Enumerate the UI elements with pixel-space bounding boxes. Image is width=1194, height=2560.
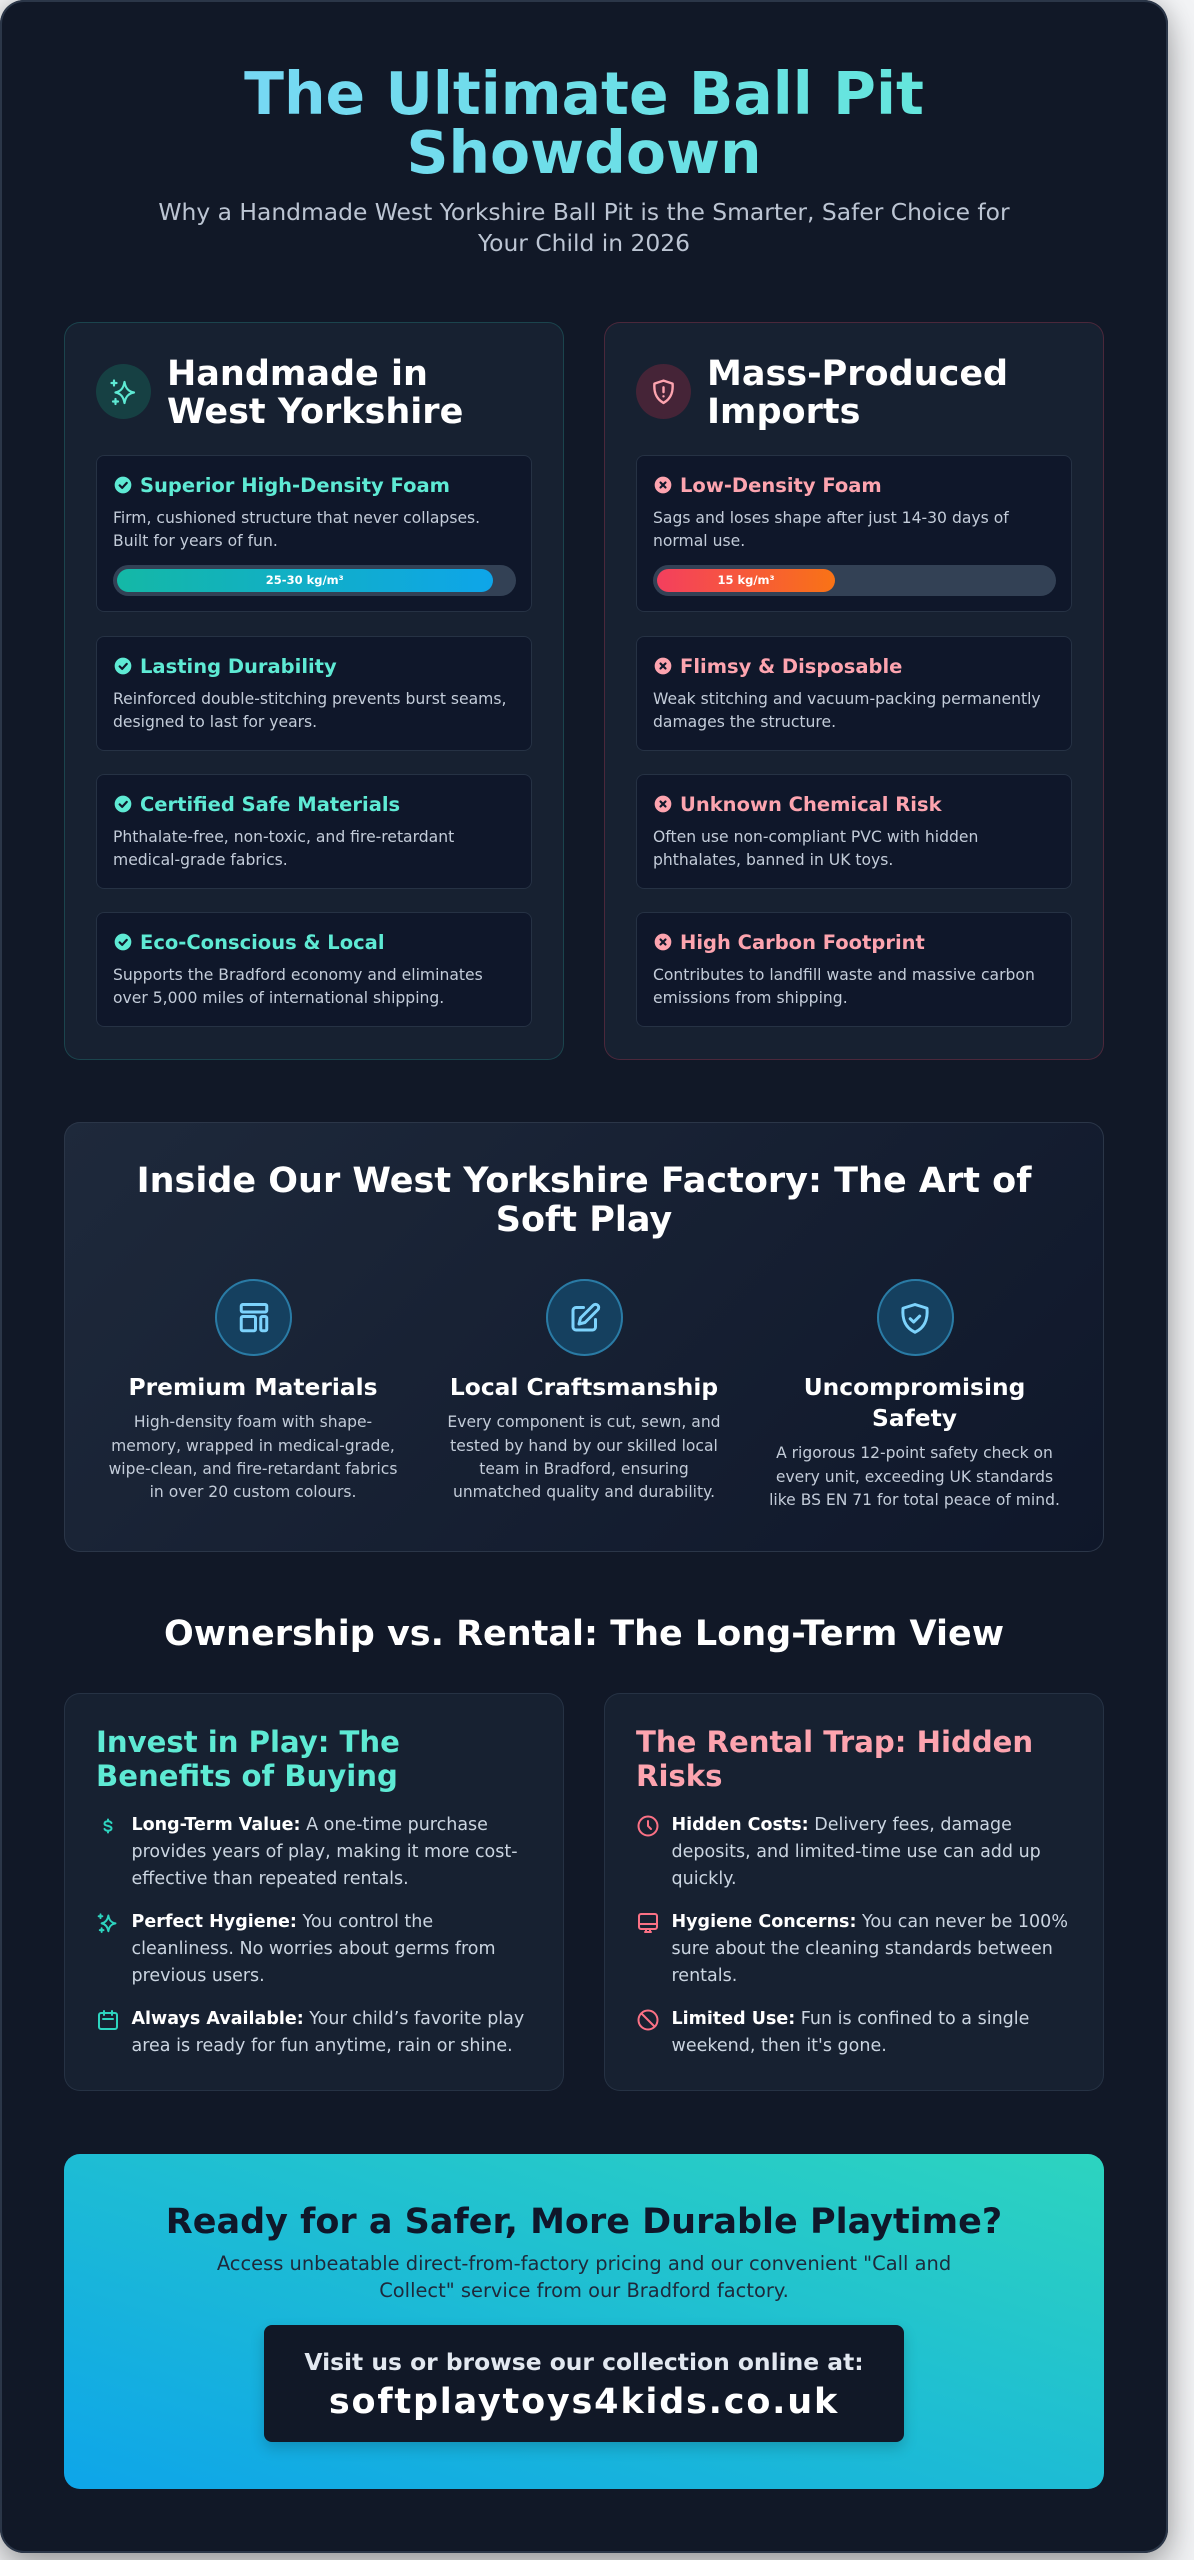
icon: dollar: [104, 1818, 112, 1834]
card: durability: [96, 636, 532, 751]
icon: cross: [654, 796, 672, 812]
item text: [672, 1812, 1041, 1893]
card: eco: [96, 912, 532, 1027]
list item: always available: [98, 2009, 524, 2056]
card: carbon footprint: [636, 912, 1072, 1027]
heading: West Yorkshire: [167, 392, 463, 432]
title: Showdown: [406, 118, 762, 186]
panel: mass-produced imports: [604, 322, 1104, 1060]
card title: Flimsy & Disposable: [680, 655, 902, 678]
list item: limited use: [636, 2006, 1076, 2061]
card text: phthalates, banned in UK toys.: [653, 851, 893, 869]
column text: A rigorous 12-point safety check on: [776, 1444, 1053, 1462]
icon: monitor: [636, 1911, 660, 1935]
cta button: [264, 2325, 904, 2442]
card text: Phthalate-free, non-toxic, and fire-retardant: [113, 828, 454, 846]
item text: [132, 2009, 524, 2056]
item text: provides years of play, making it more cost-: [132, 1842, 518, 1862]
card text: damages the structure.: [653, 713, 836, 731]
item text: Hidden Costs: Delivery fees, damage: [672, 1815, 1012, 1835]
heading: Handmade in: [167, 354, 428, 394]
list item: perfect hygiene: [98, 1912, 496, 1986]
icon: clock: [638, 1816, 658, 1836]
card text: over 5,000 miles of international shipping.: [113, 989, 444, 1007]
subtitle: [158, 198, 1010, 256]
icon: sparkles: [96, 364, 151, 419]
factory heading: Soft Play: [496, 1200, 672, 1240]
list item: long-term value: [104, 1815, 518, 1889]
column text: every unit, exceeding UK standards: [776, 1468, 1053, 1486]
card text: Weak stitching and vacuum-packing permanently: [653, 690, 1041, 708]
card title: Superior High-Density Foam: [140, 474, 450, 497]
panel: inside the factory: [64, 1122, 1104, 1552]
cta text: Access unbeatable direct-from-factory pricing and our convenient "Call and: [217, 2252, 951, 2274]
icon: cross: [654, 934, 672, 950]
density bar: 15 kg/m³: [717, 573, 775, 587]
icon: check: [114, 796, 132, 812]
card title: Lasting Durability: [140, 655, 337, 678]
card text: Supports the Bradford economy and eliminates: [113, 966, 483, 984]
item text: area is ready for fun anytime, rain or shine.: [132, 2036, 513, 2056]
column text: like BS EN 71 for total peace of mind.: [769, 1491, 1060, 1509]
button label: Visit us or browse our collection online at:: [304, 2348, 864, 2376]
column text: [447, 1413, 721, 1501]
card text: [653, 508, 1010, 550]
title: The Ultimate Ball Pit: [244, 60, 924, 128]
panel heading: Invest in Play: The: [96, 1725, 400, 1759]
column text: High-density foam with shape-: [134, 1413, 372, 1431]
heading: Imports: [707, 392, 860, 432]
density bar: [113, 565, 516, 596]
panel heading: Risks: [636, 1759, 722, 1793]
card: low density foam: [636, 455, 1072, 612]
icon: shield check: [876, 1279, 954, 1356]
card: chemical risk: [636, 774, 1072, 889]
item text: Long-Term Value: A one-time purchase: [132, 1815, 488, 1835]
card text: designed to last for years.: [113, 713, 317, 731]
card text: Contributes to landfill waste and massive carbon: [653, 966, 1035, 984]
column text: Every component is cut, sewn, and: [447, 1413, 721, 1431]
card text: Firm, cushioned structure that never collapses.: [113, 508, 480, 526]
heading: [707, 354, 1008, 432]
column text: team in Bradford, ensuring: [479, 1460, 689, 1478]
card text: Reinforced double-stitching prevents burst seams,: [113, 690, 506, 708]
cta heading: Ready for a Safer, More Durable Playtime?: [166, 2202, 1002, 2242]
column text: [109, 1413, 397, 1501]
cta text: Collect" service from our Bradford factory.: [379, 2279, 789, 2302]
panel heading: [636, 1725, 1033, 1793]
card title: Certified Safe Materials: [140, 793, 400, 816]
card text: [113, 508, 480, 550]
list item: hygiene concerns: [636, 1909, 1076, 1991]
card: superior foam: [96, 455, 532, 612]
icon: prohibited: [636, 2008, 660, 2032]
section heading: ownership vs rental: Ownership vs. Rental: The Long-Term View: [164, 1614, 1004, 1654]
card text: Built for years of fun.: [113, 532, 278, 550]
subtitle: Your Child in 2026: [478, 228, 690, 256]
icon: cross: [654, 658, 672, 674]
column title: Premium Materials: [128, 1372, 378, 1400]
cta text: [64, 2250, 1104, 2305]
panel: benefits of buying: [64, 1693, 564, 2091]
card: safe materials: [96, 774, 532, 889]
item text: rentals.: [672, 1966, 737, 1986]
item text: Always Available: Your child’s favorite play: [132, 2009, 524, 2029]
item text: Perfect Hygiene: You control the: [132, 1912, 433, 1932]
item text: cleanliness. No worries about germs from: [132, 1939, 496, 1959]
item text: weekend, then it's gone.: [672, 2036, 887, 2056]
item text: quickly.: [672, 1869, 737, 1889]
column title: [804, 1372, 1025, 1432]
column: uncompromising safety: [769, 1279, 1060, 1509]
icon: check: [114, 658, 132, 674]
website: softplaytoys4kids.co.uk: [329, 2382, 839, 2422]
panel heading: Benefits of Buying: [96, 1759, 398, 1793]
icon: check: [114, 476, 132, 494]
item text: [132, 1815, 518, 1889]
card text: Often use non-compliant PVC with hidden: [653, 828, 978, 846]
panel: the rental trap: [604, 1693, 1104, 2091]
card: flimsy: [636, 636, 1072, 751]
card title: Eco-Conscious & Local: [140, 931, 385, 954]
icon: calendar: [98, 2010, 118, 2030]
item text: sure about the cleaning standards between: [672, 1939, 1053, 1959]
column title: Uncompromising: [804, 1372, 1025, 1400]
card text: [653, 966, 1035, 1007]
card text: [113, 966, 483, 1007]
card text: emissions from shipping.: [653, 989, 848, 1007]
card text: normal use.: [653, 532, 745, 550]
icon: sparkles: [98, 1913, 116, 1933]
title: [0, 65, 1168, 182]
panel heading: The Rental Trap: Hidden: [636, 1725, 1033, 1759]
column title: Safety: [872, 1404, 957, 1432]
card title: Low-Density Foam: [680, 474, 882, 497]
card text: [113, 828, 454, 869]
item text: deposits, and limited-time use can add up: [672, 1842, 1041, 1862]
icon: layout: [215, 1279, 292, 1356]
item text: effective than repeated rentals.: [132, 1869, 409, 1889]
panel heading: [96, 1725, 400, 1793]
card text: Sags and loses shape after just 14-30 days of: [653, 508, 1009, 526]
list item: hidden costs: [638, 1815, 1041, 1889]
card text: [653, 828, 978, 869]
column text: unmatched quality and durability.: [453, 1483, 715, 1501]
column text: wipe-clean, and fire-retardant fabrics: [109, 1460, 397, 1478]
card title: Unknown Chemical Risk: [680, 793, 942, 816]
factory heading: [137, 1161, 1032, 1240]
icon: edit: [546, 1279, 623, 1356]
subtitle: Why a Handmade West Yorkshire Ball Pit is the Smarter, Safer Choice for: [158, 198, 1010, 226]
icon: shield alert: [636, 364, 691, 419]
item text: [132, 1912, 496, 1986]
card title: High Carbon Footprint: [680, 931, 925, 954]
column text: in over 20 custom colours.: [150, 1483, 356, 1501]
card text: [653, 690, 1041, 731]
column title: Local Craftsmanship: [450, 1372, 718, 1400]
item text: Hygiene Concerns: You can never be 100%: [672, 1912, 1068, 1932]
column text: memory, wrapped in medical-grade,: [111, 1437, 395, 1455]
column text: [769, 1444, 1060, 1509]
card text: [113, 690, 506, 731]
item text: [672, 1909, 1068, 1990]
item text: Limited Use: Fun is confined to a single: [672, 2009, 1029, 2029]
item text: previous users.: [132, 1966, 265, 1986]
factory heading: Inside Our West Yorkshire Factory: The Art of: [137, 1161, 1031, 1201]
column: local craftsmanship: [447, 1279, 721, 1501]
call to action: [64, 2154, 1104, 2489]
card text: medical-grade fabrics.: [113, 851, 288, 869]
heading: [167, 354, 463, 432]
density bar: [653, 565, 1056, 596]
icon: cross: [654, 476, 672, 494]
icon: check: [114, 934, 132, 950]
column text: tested by hand by our skilled local: [450, 1437, 718, 1455]
item text: [672, 2006, 1029, 2060]
panel: handmade in West Yorkshire: [64, 322, 564, 1060]
heading: Mass-Produced: [707, 354, 1008, 394]
column: premium materials: [109, 1279, 397, 1501]
density bar: 25-30 kg/m³: [266, 573, 344, 587]
